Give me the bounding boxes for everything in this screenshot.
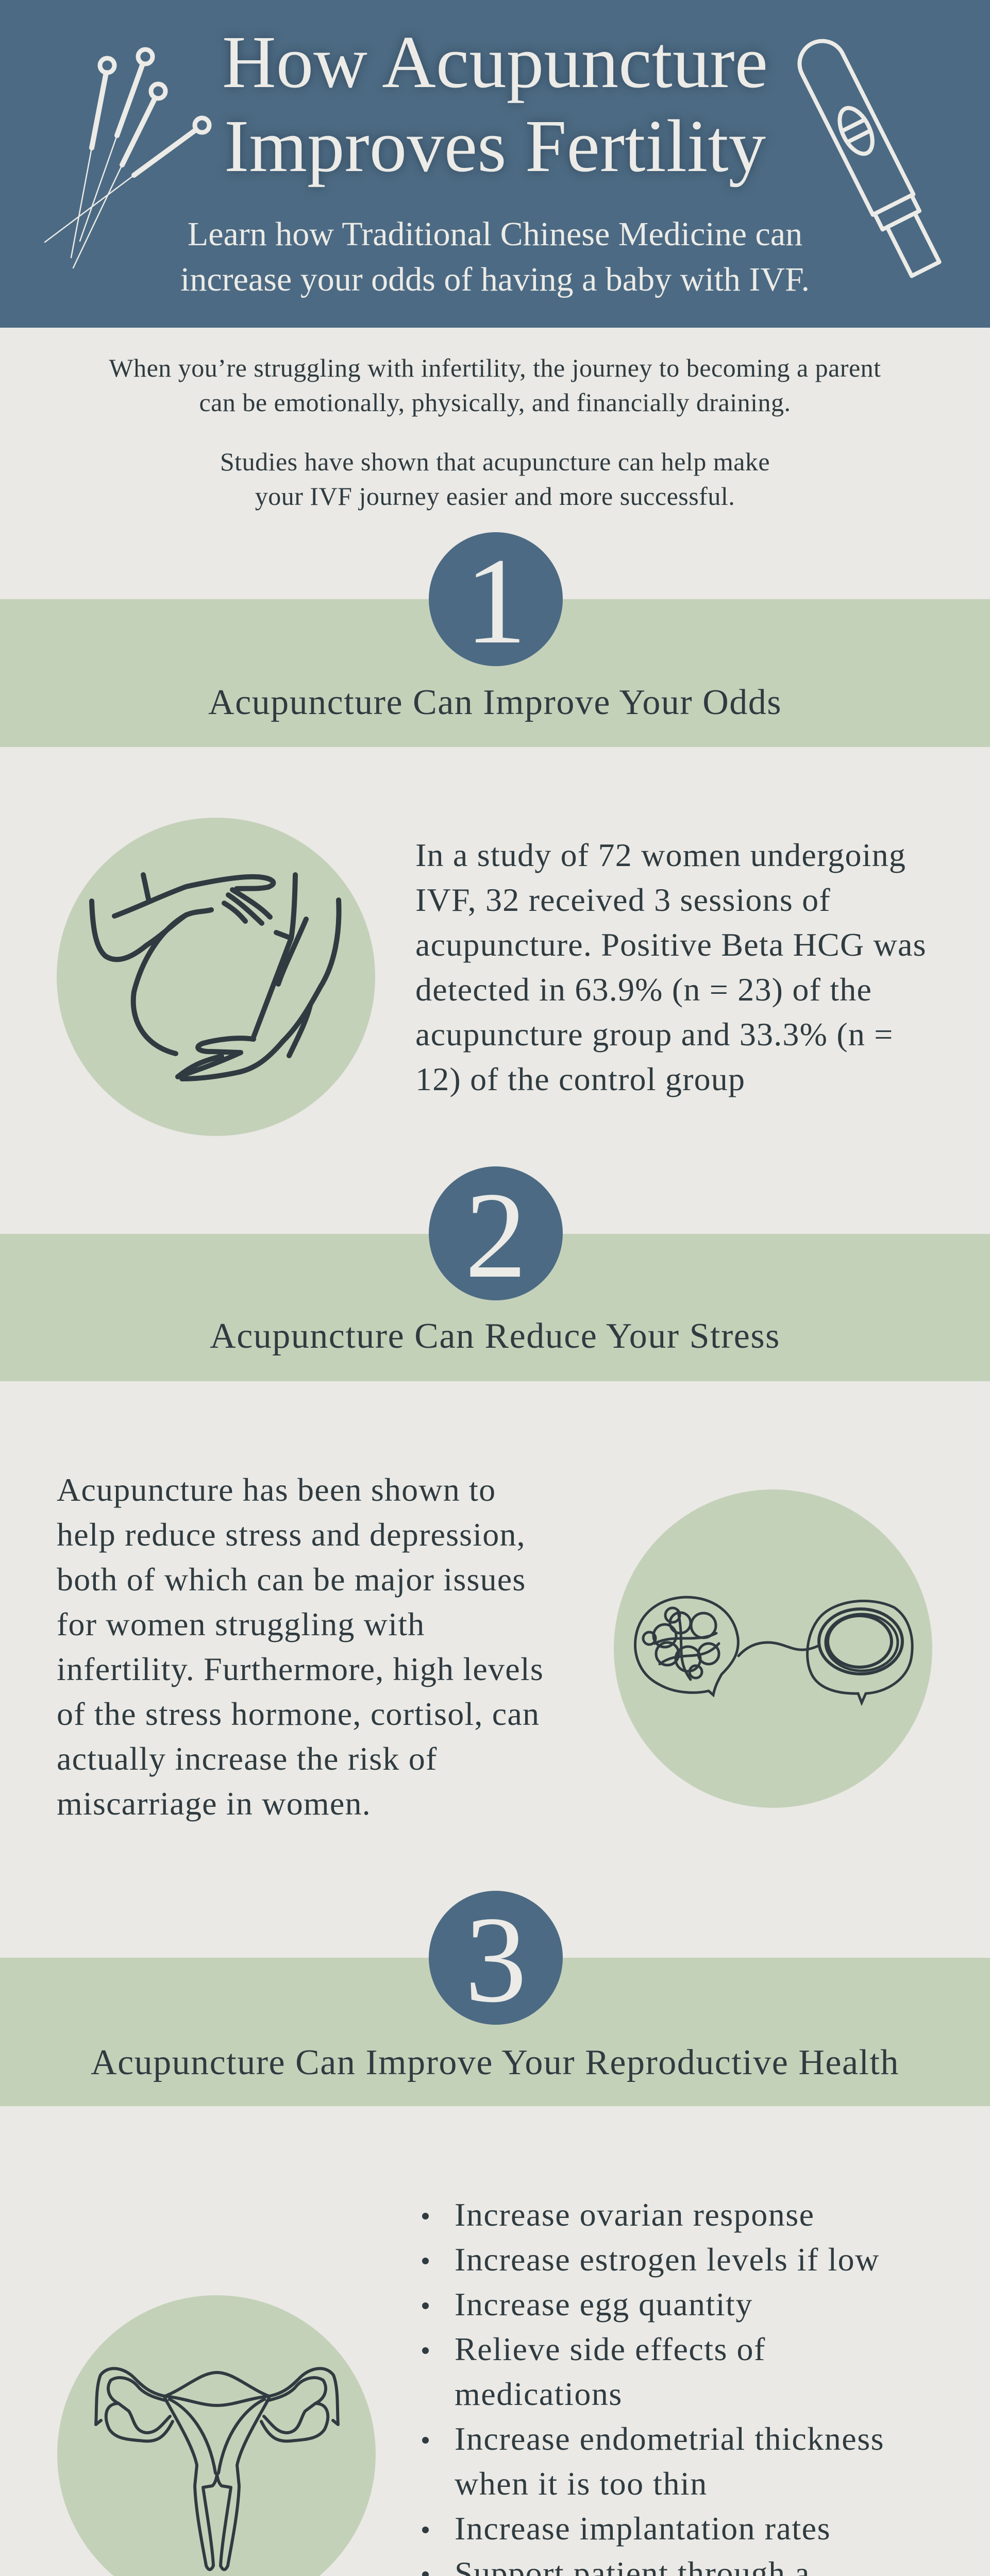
- icon: pregnant belly: [57, 818, 375, 1136]
- text: stress: help reduce stress and depression,: [57, 1516, 526, 1553]
- intro text: can be emotionally, physically, and financially draining.: [199, 388, 791, 417]
- heading 3: Acupuncture Can Improve Your Reproductive Health: [91, 2043, 899, 2082]
- bullet list: reproductive benefits: Increase estrogen levels if low: [455, 2241, 880, 2278]
- subtitle: [180, 215, 810, 298]
- intro text: [109, 353, 881, 417]
- text: stress: miscarriage in women.: [57, 1785, 371, 1822]
- text: stress: infertility. Furthermore, high levels: [57, 1651, 544, 1687]
- intro text 2: Studies have shown that acupuncture can help make: [220, 447, 770, 476]
- text: study results: acupuncture group and 33.3% (n =: [415, 1016, 894, 1053]
- text: study results: acupuncture. Positive Beta HCG was: [415, 926, 927, 963]
- intro text: When you’re struggling with infertility, the journey to becoming a parent: [109, 353, 881, 382]
- icon: tangled thoughts: [614, 1489, 932, 1808]
- text: stress: for women struggling with: [57, 1606, 425, 1642]
- text: study results: detected in 63.9% (n = 23) of the: [415, 971, 872, 1008]
- text: study results: 12) of the control group: [415, 1061, 745, 1097]
- text: study results: IVF, 32 received 3 sessions of: [415, 882, 831, 918]
- section 2 band: [0, 1234, 990, 1381]
- bullet list: reproductive benefits: Increase egg quantity: [455, 2286, 753, 2323]
- bullet list: reproductive benefits: [422, 2196, 884, 2576]
- section 3 band: [0, 1958, 990, 2106]
- text: study results: In a study of 72 women undergoing: [415, 837, 906, 873]
- section 1 band: [0, 599, 990, 747]
- intro text 2: your IVF journey easier and more successful.: [255, 482, 735, 511]
- subtitle: increase your odds of having a baby with IVF.: [180, 261, 810, 298]
- intro text 2: [220, 447, 770, 511]
- bullet list: reproductive benefits: Increase implantation rates: [455, 2510, 831, 2547]
- icon: pregnancy test: [798, 39, 942, 278]
- text: stress: [57, 1471, 544, 1822]
- number badge 3: 3: [465, 1891, 527, 2025]
- text: study results: [415, 837, 927, 1097]
- text: stress: both of which can be major issues: [57, 1561, 526, 1598]
- text: stress: of the stress hormone, cortisol, can: [57, 1696, 540, 1732]
- bullet list: reproductive benefits: Increase ovarian response: [455, 2196, 814, 2233]
- icon: acupuncture needles: [44, 47, 211, 269]
- text: stress: actually increase the risk of: [57, 1740, 437, 1777]
- heading 2: Acupuncture Can Reduce Your Stress: [210, 1316, 780, 1356]
- header banner: [0, 0, 990, 328]
- title: How Acupuncture: [222, 21, 768, 104]
- number badge 2: [429, 1166, 563, 1301]
- number badge 2: 2: [465, 1166, 527, 1301]
- number badge 1: 1: [465, 532, 527, 667]
- icon: uterus: [57, 2295, 376, 2576]
- bullet list: reproductive benefits: Relieve side effects of: [455, 2331, 766, 2367]
- bullet list: reproductive benefits: medications: [455, 2376, 623, 2412]
- bullet list: reproductive benefits: when it is too thin: [455, 2465, 708, 2502]
- number badge 1: [429, 532, 563, 667]
- heading 1: Acupuncture Can Improve Your Odds: [208, 683, 782, 722]
- title: Improves Fertility: [224, 105, 766, 188]
- text: stress: Acupuncture has been shown to: [57, 1471, 496, 1508]
- number badge 3: [429, 1891, 563, 2025]
- subtitle: Learn how Traditional Chinese Medicine can: [188, 215, 802, 253]
- title: [222, 21, 768, 190]
- bullet list: reproductive benefits: Increase endometrial thickness: [455, 2420, 884, 2457]
